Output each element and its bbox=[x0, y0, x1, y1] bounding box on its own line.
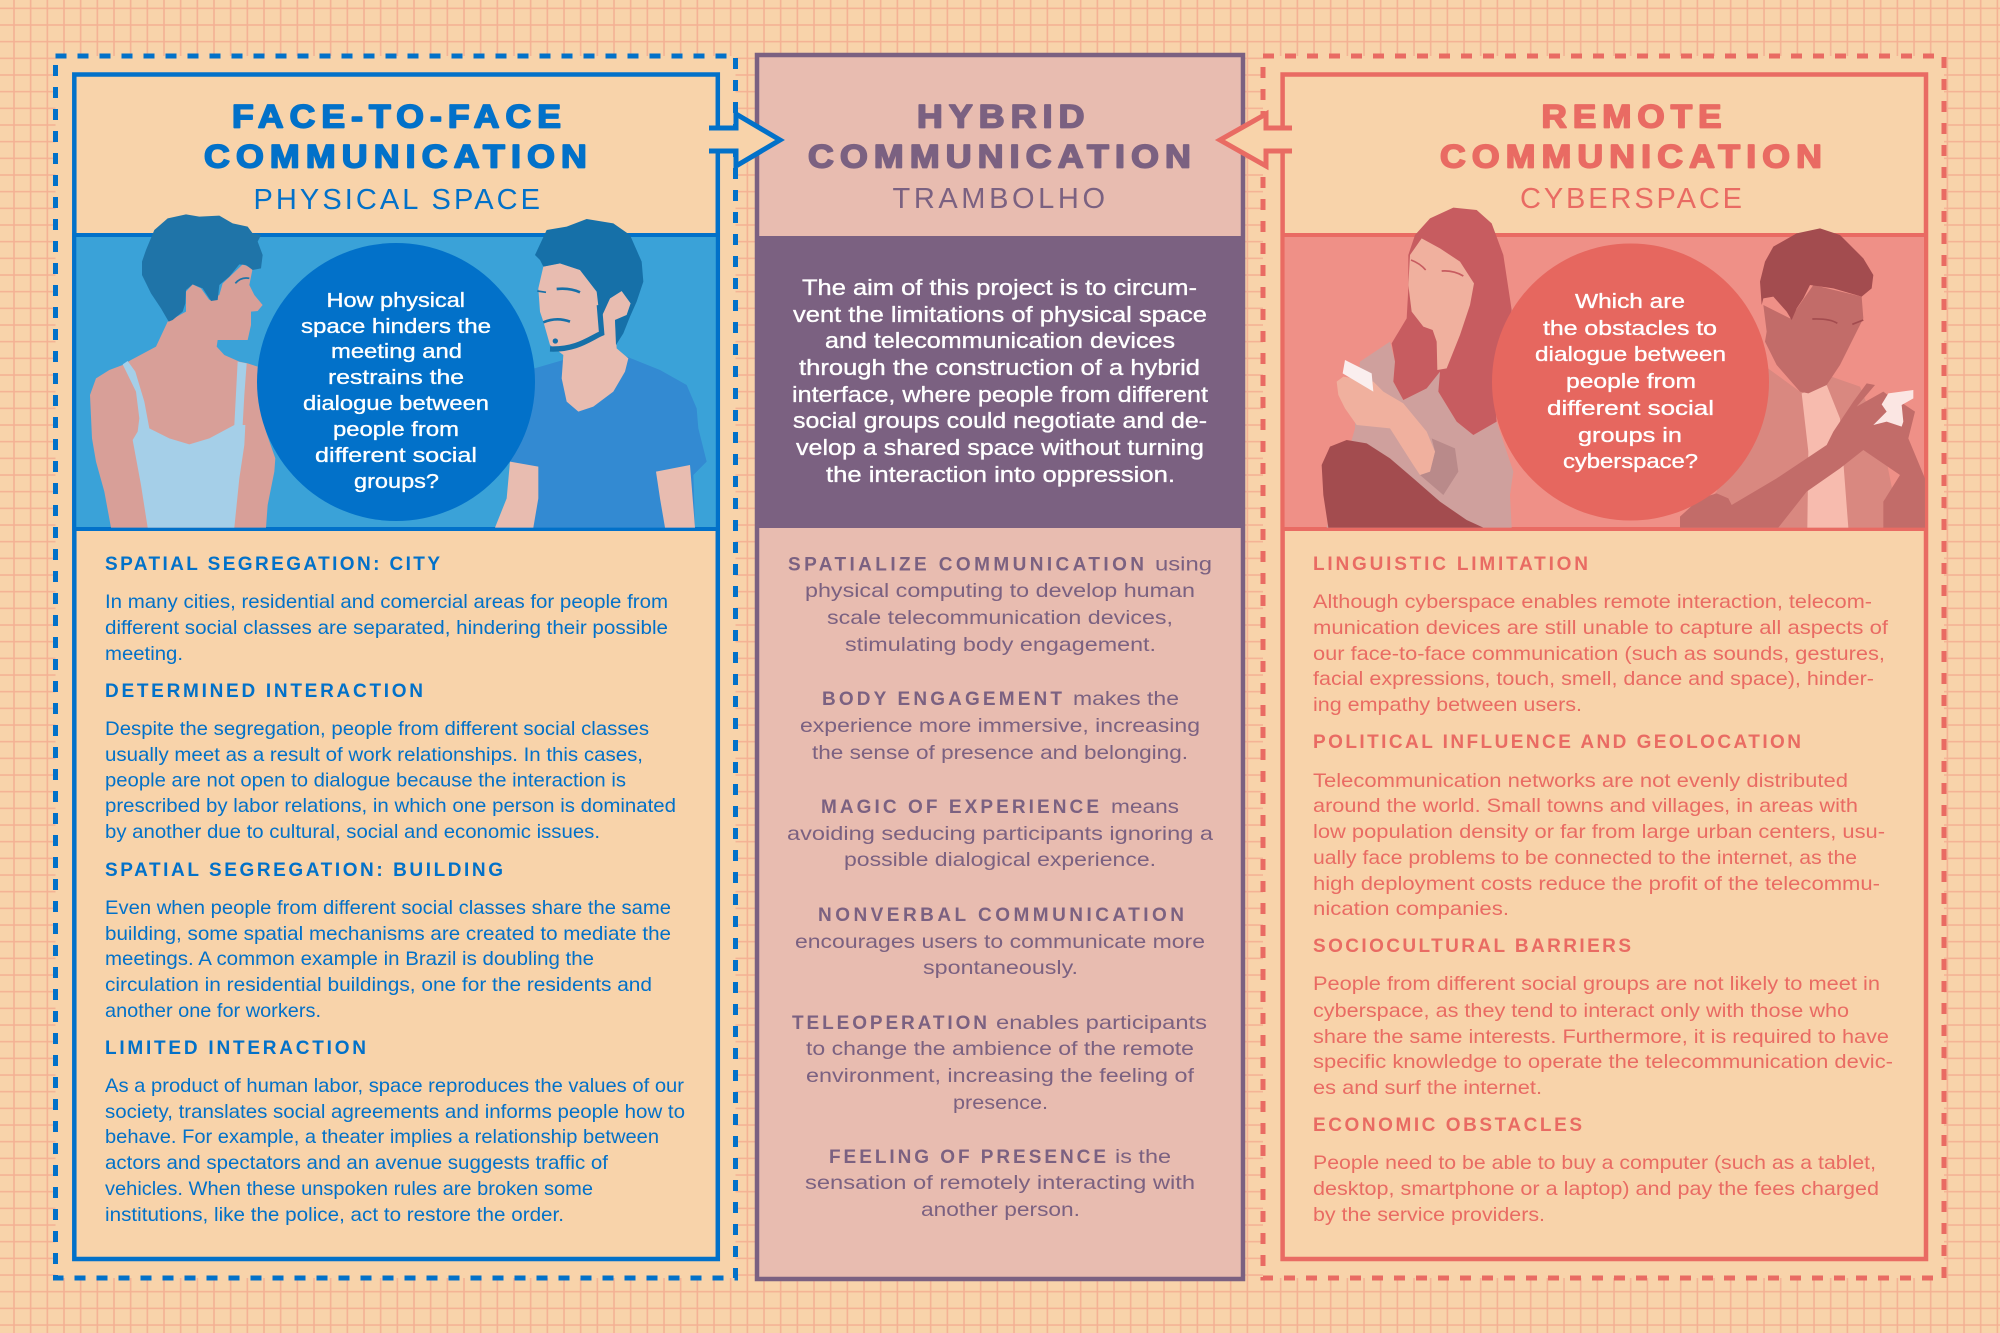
text block: teleoperation: to change the ambience of the remote bbox=[806, 1038, 1194, 1060]
illustration: two people on phones in cyberspace bbox=[1283, 208, 1926, 529]
text block: body engagement: experience more immersive, increasing bbox=[800, 715, 1200, 737]
text block: spatialize communication: scale telecommunication devices, bbox=[827, 607, 1173, 629]
callout: physical space question: space hinders the bbox=[301, 315, 491, 338]
figure: woman with phone bbox=[1322, 208, 1513, 528]
text block: project aim: velop a shared space without turning bbox=[796, 435, 1204, 460]
text block: political influence and geolocation: nication companies. bbox=[1313, 898, 1509, 920]
text block: teleoperation bbox=[792, 1012, 1207, 1114]
heading: hybrid bbox=[808, 98, 1197, 215]
text block: spatial segregation building: circulation in residential buildings, one for the residents and bbox=[105, 974, 652, 996]
text block: political influence and geolocation bbox=[1313, 732, 1885, 920]
text block: determined interaction: usually meet as a result of work relationships. In this cases, bbox=[105, 744, 643, 766]
text block: limited interaction bbox=[105, 1038, 685, 1226]
text block: determined interaction: DETERMINED INTERACTION bbox=[105, 681, 423, 702]
text block: nonverbal communication: spontaneously. bbox=[923, 957, 1078, 979]
text block: magic of experience: means bbox=[1111, 796, 1179, 818]
panel: face-to-face communication bbox=[56, 56, 736, 1278]
text block: feeling of presence: another person. bbox=[921, 1199, 1080, 1221]
text block: spatialize communication: using bbox=[1155, 554, 1212, 576]
text block: economic obstacles bbox=[1313, 1115, 1879, 1226]
heading: remote: COMMUNICATION bbox=[1440, 138, 1828, 174]
callout: cyberspace question: dialogue between bbox=[1535, 343, 1726, 366]
text block: project aim: and telecommunication devices bbox=[825, 328, 1175, 353]
text block: feeling of presence bbox=[805, 1146, 1195, 1221]
text block: magic of experience: MAGIC OF EXPERIENCE bbox=[821, 797, 1099, 818]
text block: spatialize communication: physical computing to develop human bbox=[805, 580, 1195, 602]
text block: determined interaction: prescribed by labor relations, in which one person is dominated bbox=[105, 795, 676, 817]
heading: face-to-face: COMMUNICATION bbox=[204, 138, 593, 174]
text block: body engagement: the sense of presence and belonging. bbox=[812, 742, 1188, 764]
heading: hybrid: COMMUNICATION bbox=[808, 138, 1197, 174]
figure: woman bbox=[90, 214, 275, 528]
text block: body engagement: makes the bbox=[1073, 688, 1179, 710]
callout: physical space question: restrains the bbox=[328, 366, 464, 389]
text block: teleoperation: presence. bbox=[953, 1092, 1048, 1114]
text block: spatialize communication bbox=[788, 554, 1212, 656]
text block: feeling of presence: FEELING OF PRESENCE bbox=[829, 1147, 1106, 1168]
heading: remote: REMOTE bbox=[1542, 98, 1728, 134]
text block: teleoperation: TELEOPERATION bbox=[792, 1013, 987, 1034]
panel: remote communication bbox=[1263, 56, 1944, 1278]
text block: body engagement: BODY ENGAGEMENT bbox=[822, 689, 1062, 710]
text block: sociocultural barriers: specific knowledge to operate the telecommunication devic- bbox=[1313, 1051, 1893, 1073]
text block: sociocultural barriers: es and surf the internet. bbox=[1313, 1077, 1542, 1099]
text block: project aim: through the construction of a hybrid bbox=[799, 355, 1200, 380]
figure: man bbox=[495, 219, 707, 528]
text block: linguistic limitation: munication devices are still unable to capture all aspects of bbox=[1313, 617, 1889, 639]
callout: cyberspace question: different social bbox=[1547, 397, 1714, 420]
text block: linguistic limitation: LINGUISTIC LIMITATION bbox=[1313, 554, 1588, 575]
text block: magic of experience bbox=[787, 796, 1213, 871]
text block: spatial segregation city: meeting. bbox=[105, 643, 183, 665]
text block: nonverbal communication: encourages users to communicate more bbox=[795, 931, 1205, 953]
text block: project aim bbox=[757, 236, 1243, 528]
text block: political influence and geolocation: Telecommunication networks are not evenly distributed bbox=[1313, 770, 1848, 792]
text block: determined interaction: by another due to cultural, social and economic issues. bbox=[105, 821, 600, 843]
text block: limited interaction: LIMITED INTERACTION bbox=[105, 1038, 366, 1059]
arrow: face-to-face into hybrid bbox=[709, 114, 780, 166]
callout: cyberspace question: people from bbox=[1566, 370, 1696, 393]
text block: sociocultural barriers: cyberspace, as they tend to interact only with those who bbox=[1313, 1000, 1849, 1022]
heading: face-to-face: PHYSICAL SPACE bbox=[254, 184, 540, 216]
text block: limited interaction: behave. For example, a theater implies a relationship between bbox=[105, 1126, 659, 1148]
text block: linguistic limitation: ing empathy between users. bbox=[1313, 694, 1582, 716]
text block: political influence and geolocation: ually face problems to be connected to the internet, as the bbox=[1313, 847, 1857, 869]
text block: limited interaction: institutions, like the police, act to restore the order. bbox=[105, 1204, 564, 1226]
illustration: two people meeting in physical space bbox=[74, 214, 718, 529]
text block: spatial segregation building: another one for workers. bbox=[105, 1000, 321, 1022]
text block: spatial segregation building: meetings. A common example in Brazil is doubling the bbox=[105, 948, 594, 970]
text block: linguistic limitation bbox=[1313, 554, 1889, 716]
callout: cyberspace question: cyberspace? bbox=[1563, 450, 1698, 473]
text block: spatial segregation building: Even when people from different social classes share the same bbox=[105, 897, 671, 919]
callout: cyberspace question: the obstacles to bbox=[1543, 317, 1717, 340]
heading: face-to-face bbox=[204, 98, 593, 216]
callout: physical space question: different social bbox=[315, 444, 477, 467]
callout: physical space question: meeting and bbox=[331, 340, 462, 363]
text block: nonverbal communication: NONVERBAL COMMUNICATION bbox=[818, 905, 1184, 926]
heading: remote bbox=[1440, 98, 1828, 215]
text block: political influence and geolocation: low population density or far from large urban centers, usu- bbox=[1313, 821, 1885, 843]
arrow: remote into hybrid bbox=[1220, 114, 1292, 166]
text block: project aim: social groups could negotiate and de- bbox=[793, 408, 1207, 433]
text block: feeling of presence: sensation of remotely interacting with bbox=[805, 1172, 1195, 1194]
text block: project aim: the interaction into oppression. bbox=[826, 462, 1175, 487]
heading: hybrid: TRAMBOLHO bbox=[892, 183, 1105, 215]
text block: linguistic limitation: our face-to-face communication (such as sounds, gestures, bbox=[1313, 643, 1885, 665]
text block: limited interaction: actors and spectators and an avenue suggests traffic of bbox=[105, 1152, 609, 1174]
text block: linguistic limitation: Although cyberspace enables remote interaction, telecom- bbox=[1313, 591, 1872, 613]
callout: physical space question: groups? bbox=[354, 470, 439, 493]
text block: feeling of presence: is the bbox=[1115, 1146, 1171, 1168]
callout: physical space question: How physical bbox=[326, 289, 465, 312]
text block: determined interaction: people are not open to dialogue because the interaction is bbox=[105, 770, 626, 792]
text block: linguistic limitation: facial expressions, touch, smell, dance and space), hinder- bbox=[1313, 668, 1874, 690]
callout: cyberspace question: Which are bbox=[1575, 290, 1685, 313]
text block: sociocultural barriers: SOCIOCULTURAL BARRIERS bbox=[1313, 936, 1631, 957]
heading: remote: CYBERSPACE bbox=[1520, 183, 1742, 215]
text block: spatial segregation building: building, some spatial mechanisms are created to mediate the bbox=[105, 923, 671, 945]
heading: face-to-face: FACE-TO-FACE bbox=[232, 98, 567, 134]
text block: sociocultural barriers: People from different social groups are not likely to meet in bbox=[1313, 973, 1880, 995]
text block: spatial segregation building bbox=[105, 860, 671, 1022]
text block: spatial segregation city: different social classes are separated, hindering their possible bbox=[105, 617, 668, 639]
text block: spatial segregation city: In many cities, residential and comercial areas for people from bbox=[105, 591, 668, 613]
callout: cyberspace question: groups in bbox=[1578, 424, 1682, 447]
text block: project aim: vent the limitations of physical space bbox=[793, 302, 1207, 327]
text block: project aim: interface, where people from different bbox=[792, 382, 1208, 407]
text block: determined interaction bbox=[105, 681, 676, 843]
heading: hybrid: HYBRID bbox=[917, 98, 1090, 134]
text block: teleoperation: environment, increasing the feeling of bbox=[806, 1065, 1195, 1087]
text block: political influence and geolocation: high deployment costs reduce the profit of the telecommu- bbox=[1313, 873, 1880, 895]
text block: sociocultural barriers bbox=[1313, 936, 1893, 1099]
callout: physical space question: dialogue between bbox=[303, 392, 489, 415]
text block: magic of experience: possible dialogical experience. bbox=[844, 849, 1156, 871]
text block: determined interaction: Despite the segregation, people from different social classes bbox=[105, 718, 649, 740]
text block: economic obstacles: People need to be able to buy a computer (such as a tablet, bbox=[1313, 1152, 1876, 1174]
text block: spatial segregation city: SPATIAL SEGREGATION: CITY bbox=[105, 554, 440, 575]
text block: limited interaction: society, translates social agreements and informs people how to bbox=[105, 1101, 685, 1123]
text block: teleoperation: enables participants bbox=[996, 1012, 1207, 1034]
callout: physical space question bbox=[257, 243, 535, 521]
text block: sociocultural barriers: share the same interests. Furthermore, it is required to have bbox=[1313, 1026, 1889, 1048]
text block: body engagement bbox=[800, 688, 1200, 764]
text block: spatialize communication: stimulating body engagement. bbox=[845, 634, 1156, 656]
text block: political influence and geolocation: POLITICAL INFLUENCE AND GEOLOCATION bbox=[1313, 732, 1801, 753]
text block: economic obstacles: ECONOMIC OBSTACLES bbox=[1313, 1115, 1582, 1136]
text block: spatialize communication: SPATIALIZE COMMUNICATION bbox=[788, 554, 1144, 576]
text block: project aim: The aim of this project is to circum- bbox=[802, 275, 1197, 300]
text block: economic obstacles: by the service providers. bbox=[1313, 1204, 1545, 1226]
figure: man with phone bbox=[1680, 228, 1925, 528]
text block: magic of experience: avoiding seducing participants ignoring a bbox=[787, 823, 1213, 845]
text block: economic obstacles: desktop, smartphone or a laptop) and pay the fees charged bbox=[1313, 1178, 1879, 1200]
text block: nonverbal communication bbox=[795, 905, 1205, 979]
text block: limited interaction: vehicles. When these unspoken rules are broken some bbox=[105, 1178, 593, 1200]
text block: spatial segregation city bbox=[105, 554, 668, 665]
callout: physical space question: people from bbox=[333, 418, 459, 441]
text block: limited interaction: As a product of human labor, space reproduces the values of our bbox=[105, 1075, 685, 1097]
text block: spatial segregation building: SPATIAL SEGREGATION: BUILDING bbox=[105, 860, 503, 881]
text block: political influence and geolocation: around the world. Small towns and villages, in areas with bbox=[1313, 795, 1858, 817]
panel: hybrid communication bbox=[757, 55, 1243, 1279]
callout: cyberspace question bbox=[1492, 244, 1769, 520]
